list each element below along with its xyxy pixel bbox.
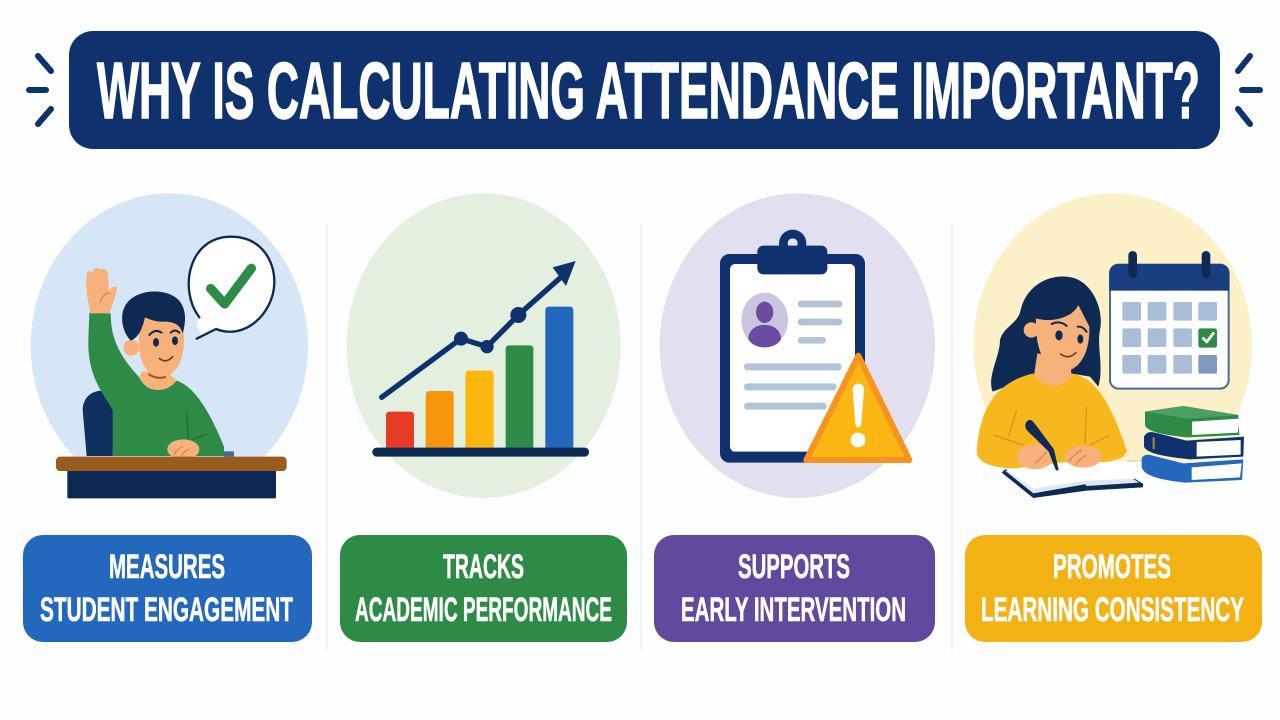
icon: speech bubble with check	[189, 237, 274, 339]
desk	[56, 451, 287, 498]
label: tracks academic performance: ACADEMIC PERFORMANCE	[355, 591, 612, 629]
label: supports early intervention	[654, 535, 935, 642]
label: promotes learning consistency	[965, 535, 1262, 642]
decorative sparks right	[1238, 56, 1260, 124]
panel: clipboard with warning illustration	[660, 193, 935, 498]
resting hand	[167, 439, 199, 459]
icon: warning triangle	[806, 356, 909, 460]
icon: stack of books	[1142, 406, 1244, 483]
title banner	[69, 31, 1220, 149]
panel: student raising hand illustration	[31, 193, 308, 498]
icon: calendar	[1109, 251, 1229, 389]
label: tracks academic performance: TRACKS	[443, 548, 524, 586]
label: measures student engagement: MEASURES	[109, 548, 225, 586]
label: measures student engagement	[23, 535, 312, 642]
label: supports early intervention: EARLY INTERVENTION	[681, 591, 906, 629]
icon: chair back	[83, 391, 115, 456]
label: tracks academic performance	[340, 535, 627, 642]
label: measures student engagement: STUDENT ENGAGEMENT	[40, 591, 293, 629]
icon: open notebook and pen	[1002, 420, 1143, 498]
student figure	[977, 276, 1127, 468]
bar chart	[372, 307, 589, 457]
panel: rising bar chart illustration	[347, 193, 621, 498]
raised hand	[86, 268, 117, 313]
decorative sparks left	[29, 56, 51, 124]
panel: student writing illustration	[973, 193, 1252, 498]
label: supports early intervention: SUPPORTS	[738, 548, 850, 586]
icon: clipboard	[720, 230, 865, 463]
label: promotes learning consistency: PROMOTES	[1053, 548, 1171, 586]
arrow: upward trend line	[382, 261, 576, 397]
student figure	[86, 268, 224, 459]
